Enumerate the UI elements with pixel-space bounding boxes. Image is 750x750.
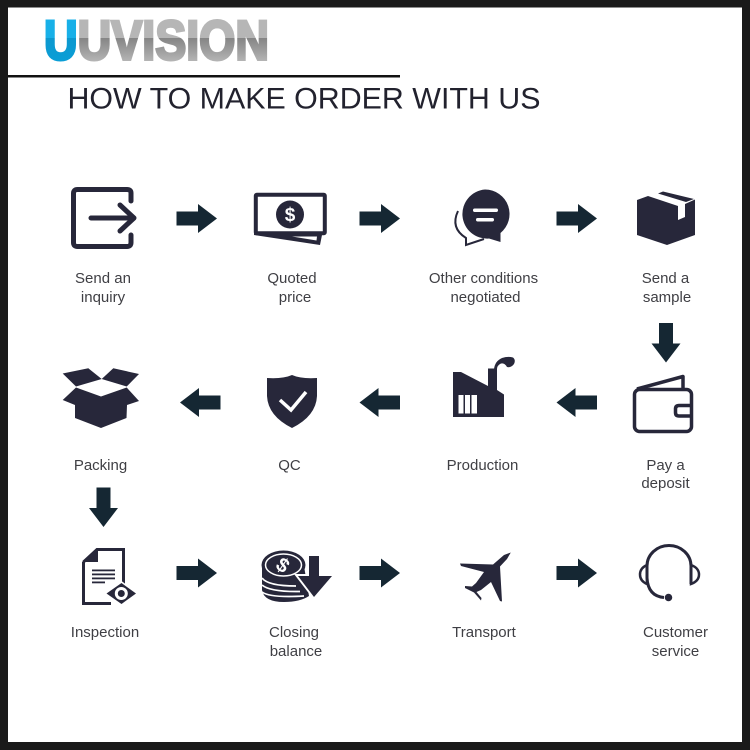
label: Other conditions xyxy=(429,270,538,287)
step: other conditions negotiated xyxy=(429,189,538,306)
label: Closing xyxy=(269,624,319,641)
step: production xyxy=(447,357,518,474)
label: price xyxy=(279,289,311,306)
icon: speech bubbles xyxy=(455,189,510,245)
step: closing balance xyxy=(262,550,335,660)
label: QC xyxy=(278,457,301,474)
logo: UUVISION: UUVISION xyxy=(44,8,269,72)
arrow right xyxy=(556,204,597,233)
arrow right xyxy=(176,204,217,233)
arrow right xyxy=(556,558,597,588)
title: HOW TO MAKE ORDER WITH US xyxy=(68,82,540,116)
label: service xyxy=(652,643,699,660)
arrow right xyxy=(360,558,400,588)
step: pay a deposit xyxy=(634,376,692,492)
arrow left xyxy=(180,388,220,417)
icon: shield with check xyxy=(267,375,317,428)
icon: inquiry xyxy=(74,190,134,246)
label: Transport xyxy=(452,624,517,641)
icon: open box xyxy=(63,368,139,428)
label: inquiry xyxy=(81,289,126,306)
label: Production xyxy=(447,457,518,474)
icon: coins with down arrow: $ xyxy=(272,554,293,578)
label: Quoted xyxy=(267,270,317,287)
label: Customer xyxy=(643,624,708,641)
label: Send an xyxy=(75,270,131,287)
step: send an inquiry xyxy=(74,190,134,306)
icon: document with eye xyxy=(82,548,138,606)
label: Packing xyxy=(74,457,127,474)
icon: wallet xyxy=(634,376,692,432)
step: inspection xyxy=(71,548,139,641)
step: customer service xyxy=(640,545,708,660)
arrow left xyxy=(556,388,597,417)
arrow right xyxy=(176,558,217,588)
icon: banknote: $ xyxy=(285,205,296,226)
step: send a sample xyxy=(637,192,695,306)
step: packing xyxy=(63,368,139,474)
label: deposit xyxy=(641,475,691,492)
step: QC xyxy=(267,375,317,474)
label: Pay a xyxy=(646,457,685,474)
label: sample xyxy=(643,289,691,306)
label: negotiated xyxy=(450,289,521,306)
arrow left xyxy=(360,388,400,417)
arrow down xyxy=(89,488,118,527)
label: Send a xyxy=(642,270,690,287)
label: Inspection xyxy=(71,624,139,641)
icon: airplane xyxy=(460,552,511,602)
step: transport xyxy=(452,552,517,641)
icon: headset xyxy=(640,545,699,600)
step: quoted price xyxy=(254,195,325,306)
arrow down xyxy=(652,323,680,362)
header rule xyxy=(8,75,400,78)
icon: parcel xyxy=(637,192,695,245)
arrow right xyxy=(360,204,400,233)
label: balance xyxy=(270,643,322,660)
icon: factory xyxy=(453,357,515,417)
